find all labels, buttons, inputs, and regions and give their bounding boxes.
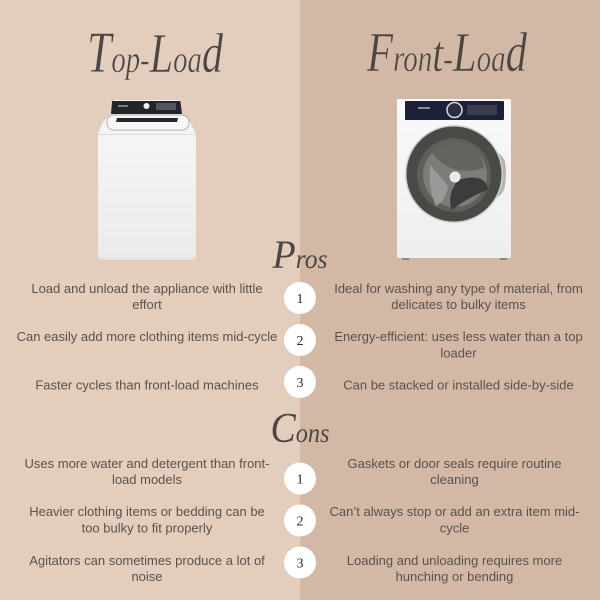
text: cons top-load 1: Uses more water and detergent than front- — [25, 456, 269, 471]
text: cons top-load 3: noise — [131, 569, 163, 584]
text: pros top-load 1: effort — [132, 297, 162, 312]
number badge: pros 2 — [284, 324, 316, 356]
number badge: pros 2: 2 — [296, 334, 304, 349]
heading: Pros: Pros — [272, 232, 328, 277]
text: pros front-load 2: Energy-efficient: uses less water than a top — [334, 329, 583, 344]
number badge: pros 1: 1 — [296, 292, 304, 307]
text: cons front-load 3: hunching or bending — [396, 569, 513, 584]
icon: top-load washer — [98, 100, 196, 260]
number badge: pros 3 — [284, 366, 316, 398]
number badge: cons 2: 2 — [296, 514, 304, 530]
pros row 2 — [17, 324, 583, 360]
heading: Front-Load: Front-Load — [366, 22, 528, 84]
number badge: cons 1: 1 — [296, 472, 304, 488]
panel: top-load background — [0, 0, 300, 600]
pros row 1 — [31, 281, 583, 314]
text: pros front-load 2: loader — [440, 346, 477, 360]
text: pros top-load 3: Faster cycles than front-load machines — [35, 378, 259, 392]
number badge: pros 1 — [284, 282, 316, 314]
text: cons top-load 2: Heavier clothing items or bedding can be — [29, 504, 265, 519]
text: cons top-load 3: Agitators can sometimes produce a lot of — [29, 553, 265, 568]
panel: front-load background — [300, 0, 600, 600]
text: cons front-load 1: cleaning — [430, 472, 479, 487]
number badge: cons 3 — [284, 546, 316, 578]
text: pros front-load 3: Can be stacked or installed side-by-side — [343, 378, 574, 392]
number badge: cons 1 — [284, 462, 316, 494]
heading: Cons: Cons — [270, 406, 330, 452]
cons row 1 — [25, 456, 561, 494]
text: cons top-load 1: load models — [112, 472, 183, 487]
text: pros front-load 1: delicates to bulky items — [391, 297, 526, 312]
text: pros top-load 1: Load and unload the appliance with little — [31, 281, 263, 296]
text: pros front-load 1: Ideal for washing any type of material, from — [334, 281, 583, 296]
text: cons front-load 2: Can’t always stop or add an extra item mid- — [330, 504, 580, 519]
text: cons front-load 1: Gaskets or door seals require routine — [348, 456, 561, 471]
icon: front-load washer — [397, 99, 511, 260]
cons row 3 — [29, 546, 562, 584]
text: cons top-load 2: too bulky to fit properly — [82, 520, 213, 536]
text: pros top-load 2: Can easily add more clothing items mid-cycle — [17, 329, 277, 344]
cons row 2 — [29, 504, 580, 536]
number badge: cons 3: 3 — [296, 556, 304, 572]
heading: Top-Load: Top-Load — [87, 20, 224, 85]
text: cons front-load 2: cycle — [440, 520, 469, 536]
number badge: cons 2 — [284, 504, 316, 536]
text: cons front-load 3: Loading and unloading requires more — [347, 553, 562, 568]
number badge: pros 3: 3 — [296, 376, 304, 391]
pros row 3 — [35, 366, 574, 398]
